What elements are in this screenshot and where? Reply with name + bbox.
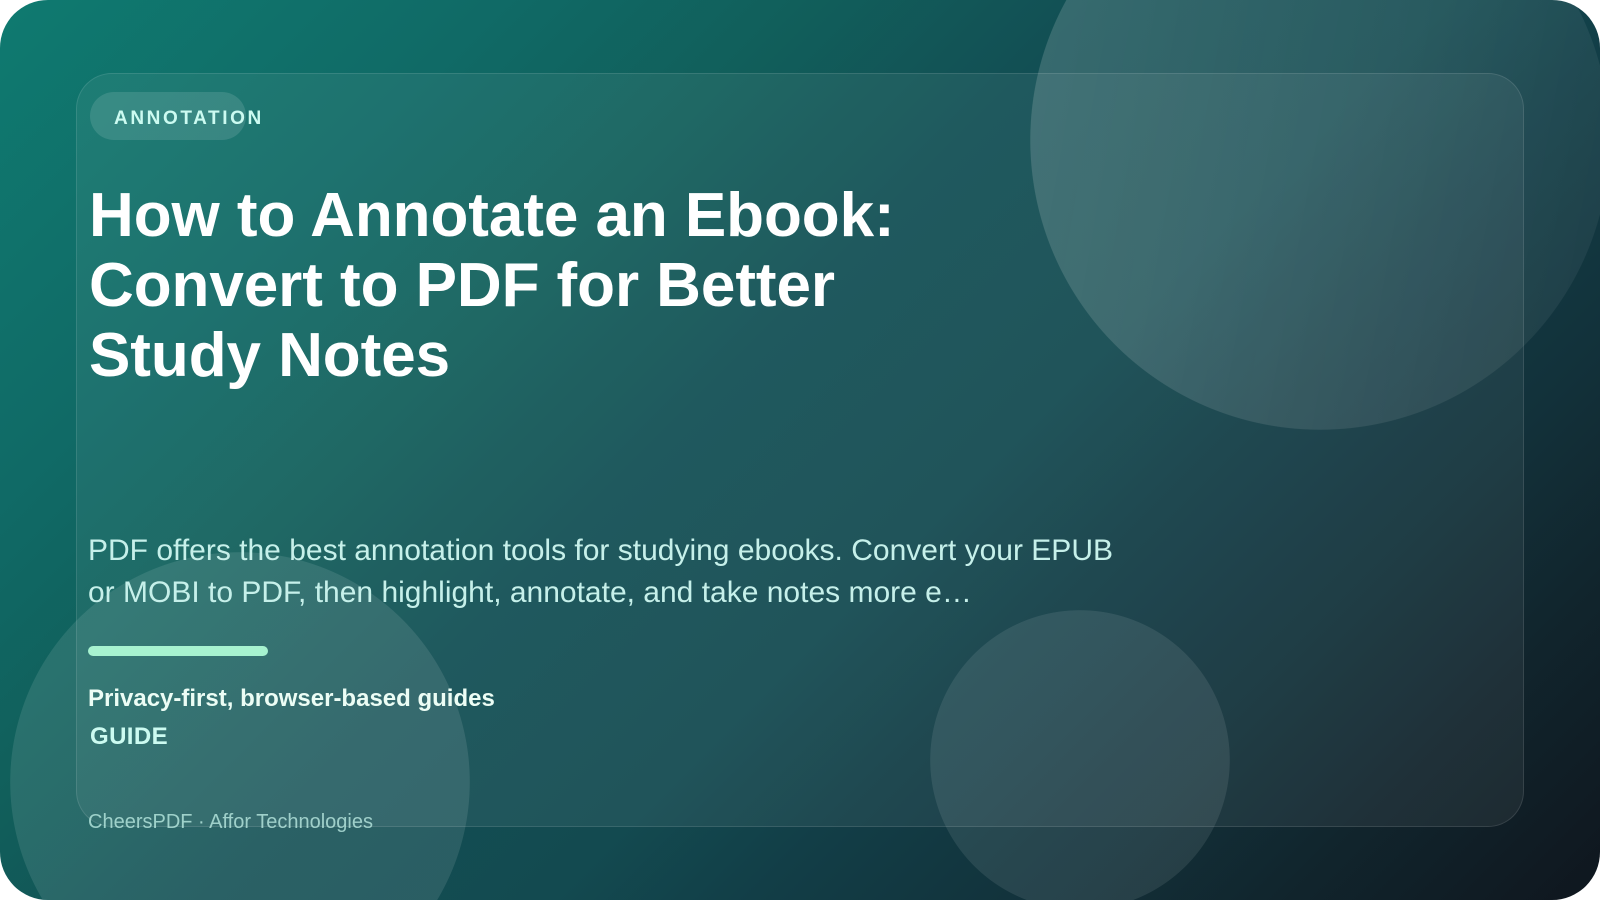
title: Convert to PDF for Better [89, 250, 835, 320]
footer credit: CheersPDF · Affor Technologies [88, 811, 373, 833]
category pill background [90, 92, 246, 140]
title: Study Notes [89, 320, 450, 390]
title: How to Annotate an Ebook: [89, 180, 895, 250]
glass card panel [76, 73, 1524, 827]
decorative circle: top right [1030, 0, 1600, 431]
description [88, 534, 1113, 609]
guide label: GUIDE [90, 723, 168, 750]
description: PDF offers the best annotation tools for studying ebooks. Convert your EPUB [88, 534, 1113, 567]
category pill label: ANNOTATION [114, 108, 264, 128]
decorative circle: bottom centre [930, 610, 1230, 900]
decorative circle: bottom left [10, 552, 470, 900]
tagline: Privacy-first, browser-based guides [88, 685, 495, 712]
title [89, 180, 895, 390]
description: or MOBI to PDF, then highlight, annotate, and take notes more e… [88, 576, 972, 609]
accent bar [88, 646, 268, 656]
